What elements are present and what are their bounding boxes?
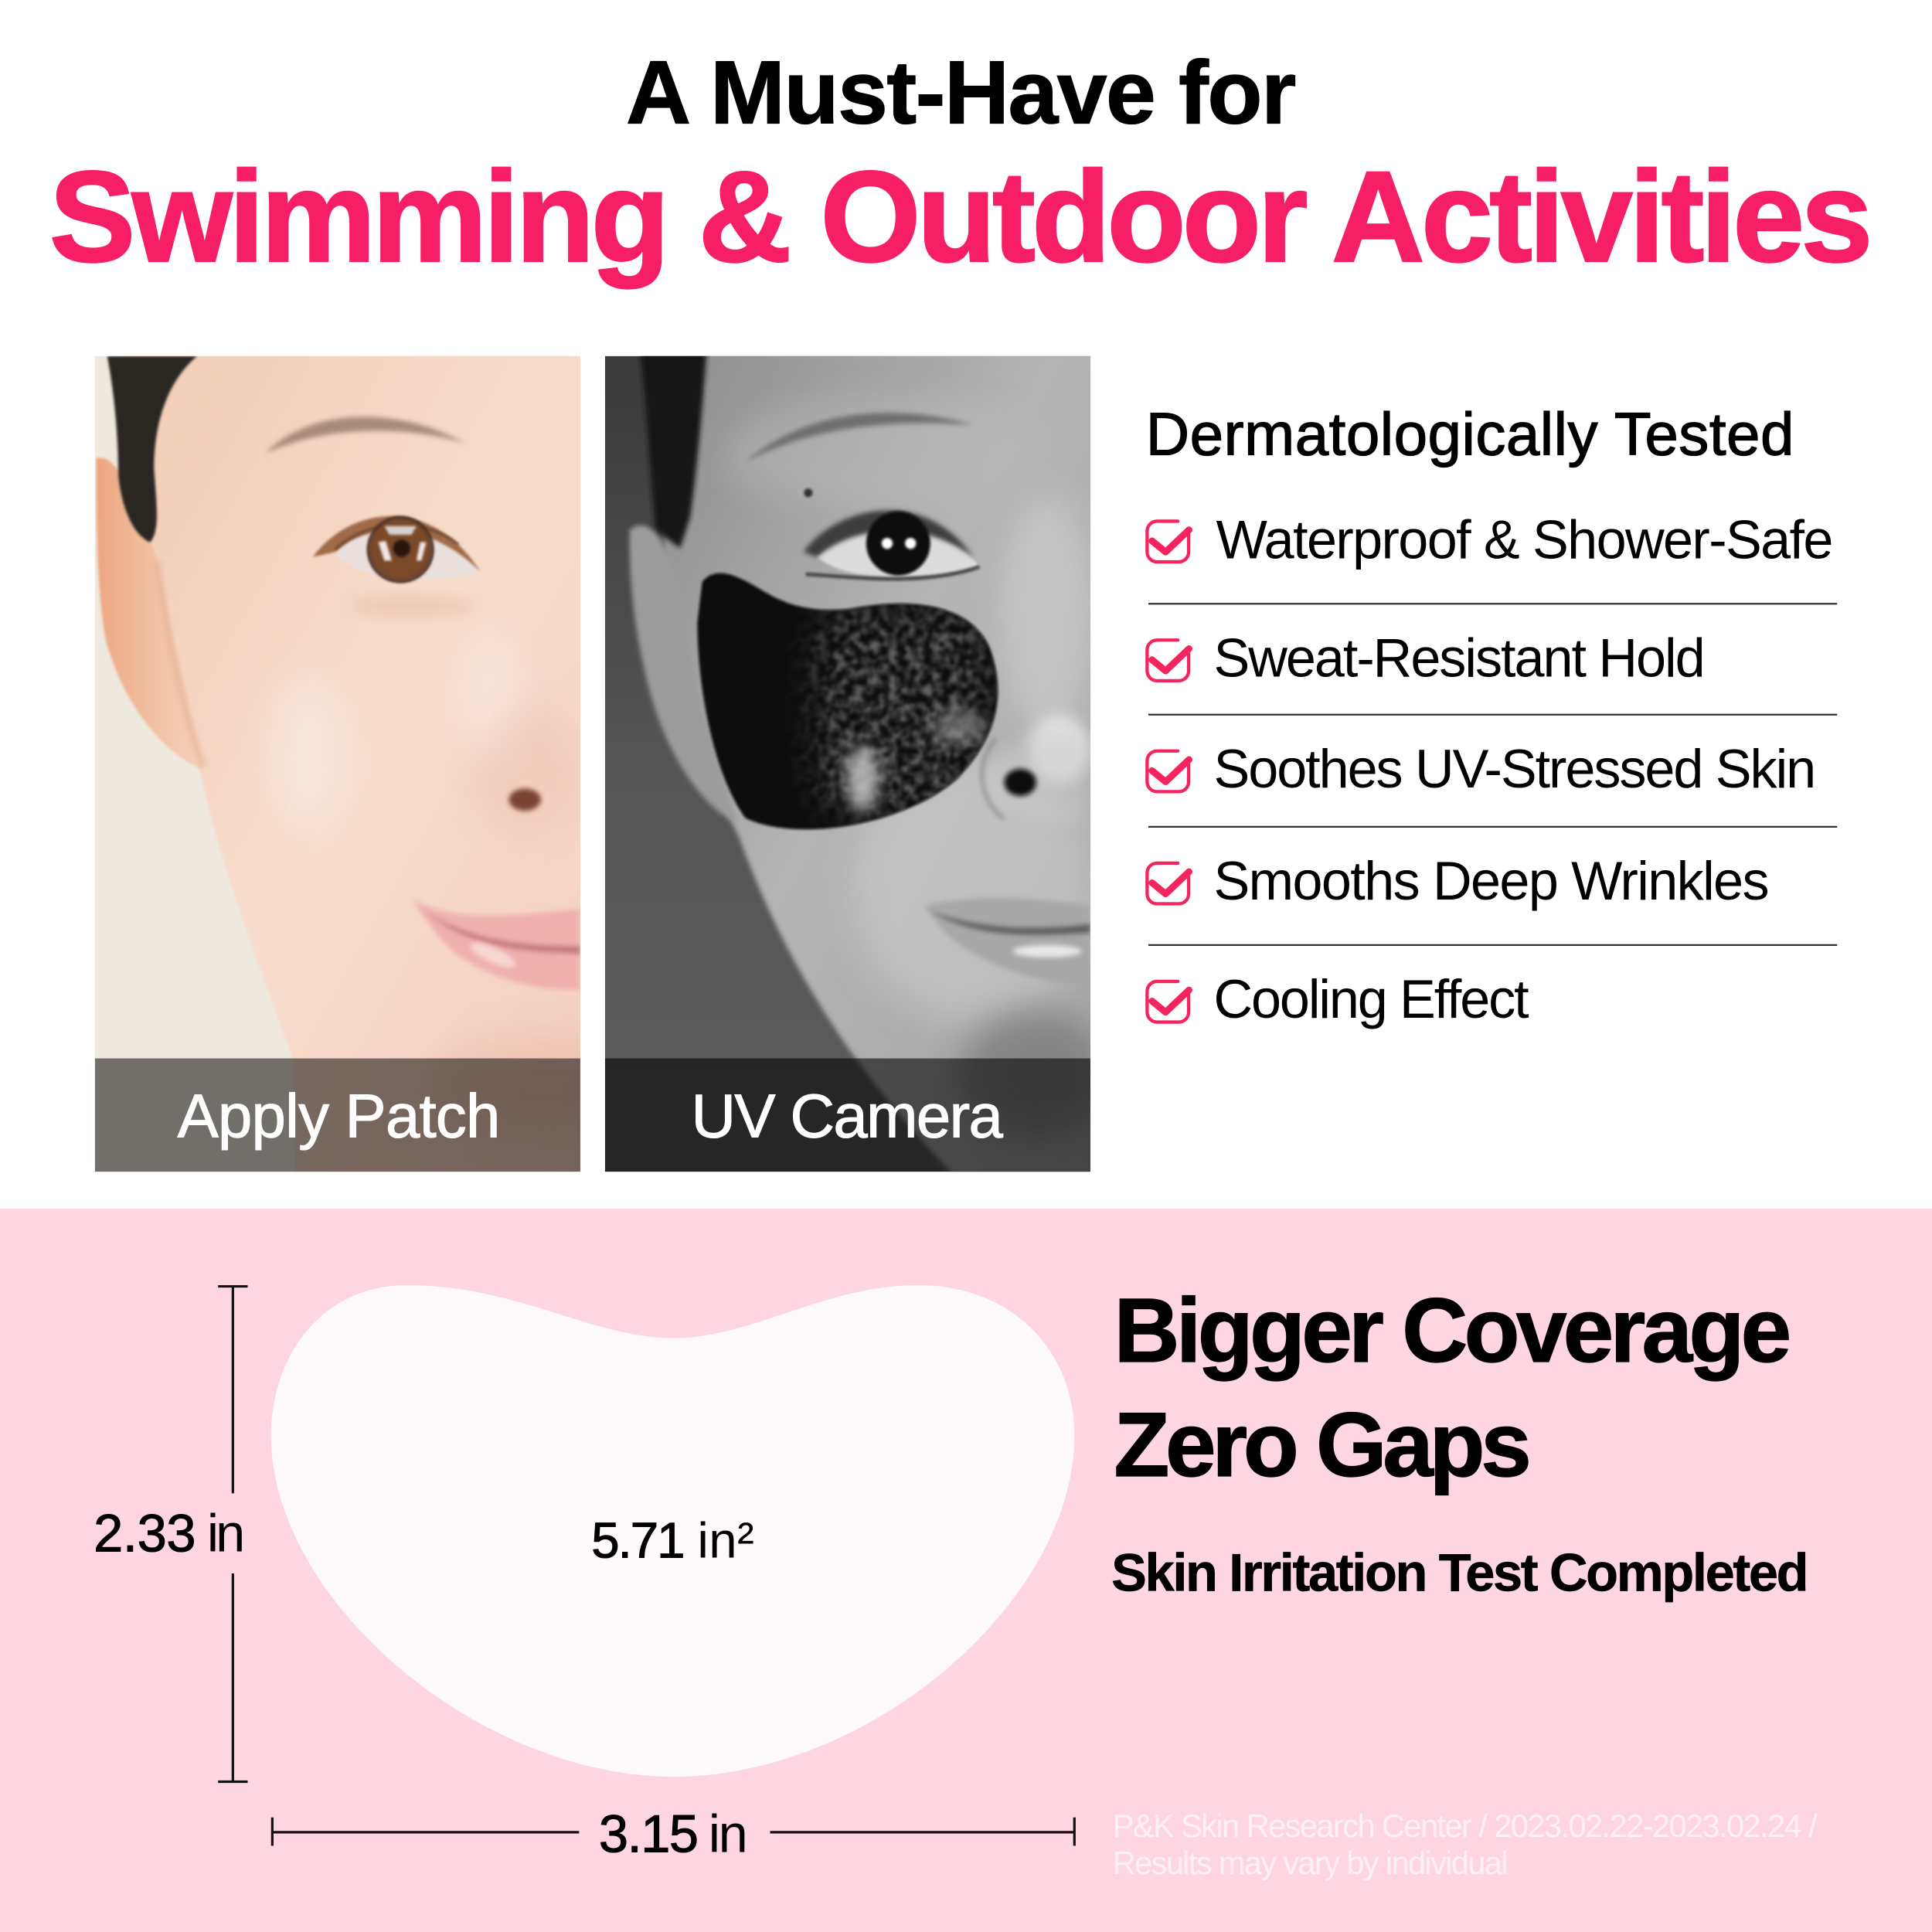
- eyebrow: [746, 413, 974, 462]
- patch shape: [271, 1285, 1074, 1777]
- mole: [804, 488, 812, 497]
- eye: [817, 529, 980, 578]
- title line one: A Must-Have for: [626, 42, 1296, 142]
- patch speckle: [815, 609, 988, 812]
- check item 4: Smooths Deep Wrinkles: [1213, 850, 1770, 911]
- photo panel: uv camera: [605, 332, 1109, 1196]
- footnote: [1113, 1808, 1818, 1881]
- area label: 5.71: [591, 1512, 685, 1568]
- footnote: Results may vary by individual: [1113, 1845, 1509, 1881]
- footnote: P&K Skin Research Center / 2023.02.22-2023.02.24 /: [1113, 1808, 1818, 1844]
- heading: bigger coverage: Bigger Coverage: [1114, 1280, 1791, 1382]
- eye: [335, 533, 479, 580]
- hair: [639, 345, 707, 549]
- label: apply patch: Apply Patch: [178, 1082, 500, 1151]
- forehead and lower-face light: [734, 410, 918, 496]
- hair: [107, 356, 197, 543]
- label bar: [605, 1059, 1090, 1172]
- ear fold shade: [158, 560, 203, 767]
- checklist: [1147, 509, 1837, 1029]
- ear: [630, 526, 740, 823]
- panel: pink size section: [0, 1209, 1932, 1932]
- under-eye shade: [351, 597, 474, 615]
- label: uv camera: UV Camera: [691, 1082, 1004, 1151]
- subheading: Skin Irritation Test Completed: [1111, 1543, 1809, 1602]
- check item 5: Cooling Effect: [1213, 968, 1529, 1029]
- lips: [413, 900, 580, 990]
- ear: [96, 457, 203, 770]
- nose highlight and nostril: [1029, 715, 1090, 784]
- height dimension: [94, 1287, 247, 1781]
- face skin: [123, 332, 604, 1196]
- eyebrow: [265, 417, 466, 454]
- area label: [591, 1512, 754, 1568]
- area label: in²: [697, 1512, 754, 1568]
- patch: black sheet: [697, 573, 998, 829]
- height dimension: in: [207, 1503, 245, 1563]
- width dimension: [272, 1804, 1074, 1863]
- eyelid: [313, 516, 481, 572]
- check item 1: Waterproof & Shower-Safe: [1216, 509, 1833, 570]
- title line two: Swimming & Outdoor Activities: [49, 145, 1872, 289]
- face skin: [663, 332, 1109, 1196]
- height dimension: 2.33: [94, 1503, 196, 1563]
- cheek highlight: [274, 678, 342, 825]
- lips: [924, 898, 1090, 986]
- heading: zero gaps: Zero Gaps: [1114, 1394, 1532, 1496]
- width dimension: 3.15: [599, 1804, 699, 1863]
- heading: dermatologically tested: Dermatologically Tested: [1146, 400, 1794, 468]
- eyelid: [804, 510, 974, 557]
- nose shade and nostril: [478, 716, 564, 818]
- check item 2: Sweat-Resistant Hold: [1213, 627, 1706, 688]
- label bar: [95, 1059, 580, 1172]
- check item 3: Soothes UV-Stressed Skin: [1213, 738, 1816, 799]
- width dimension: in: [709, 1804, 748, 1863]
- photo panel: apply patch: [94, 355, 580, 1172]
